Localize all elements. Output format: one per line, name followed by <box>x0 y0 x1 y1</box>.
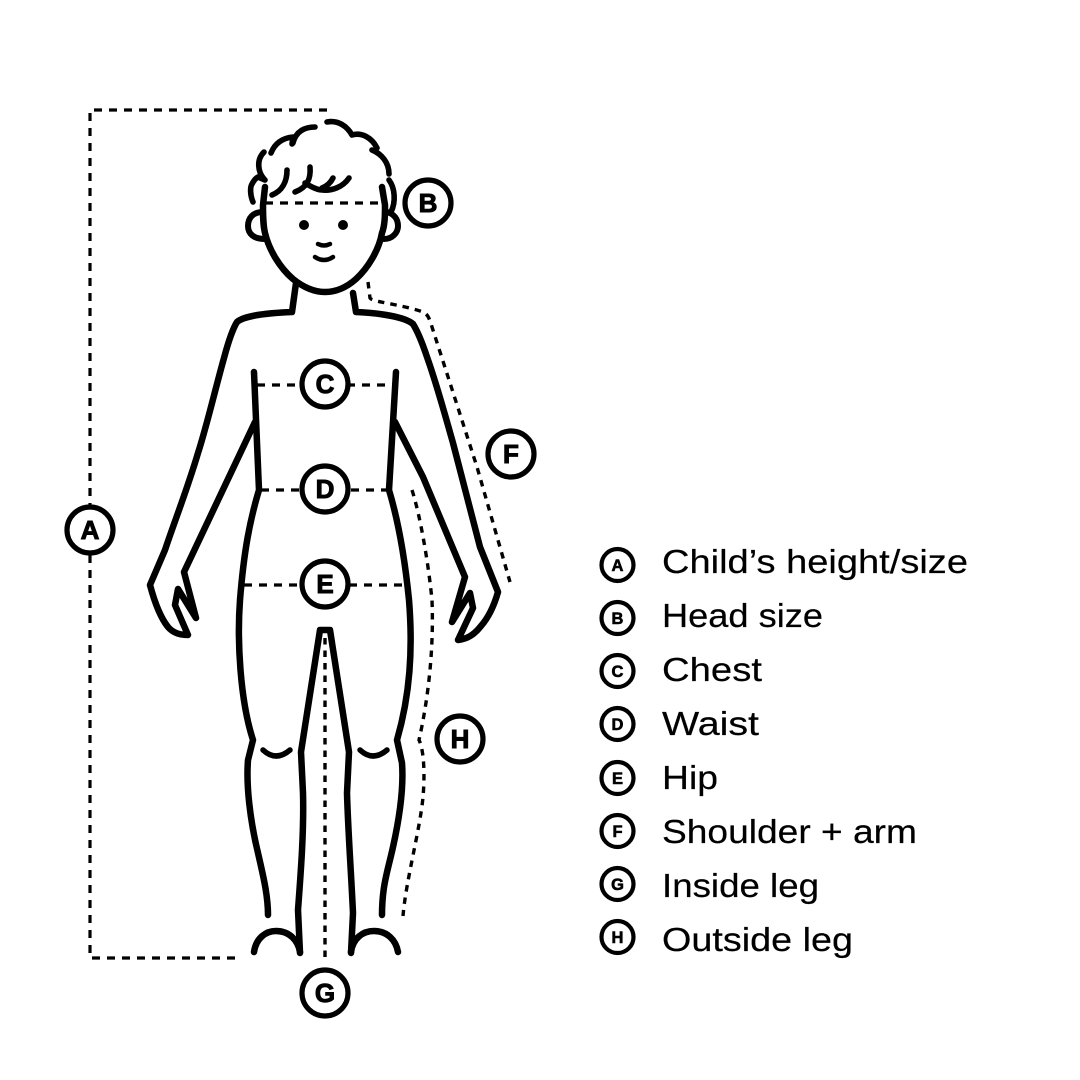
knees <box>263 750 387 756</box>
marker A: A <box>81 515 100 545</box>
marker C <box>302 361 348 407</box>
marker E: E <box>316 569 334 599</box>
hair <box>251 122 394 212</box>
marker H <box>437 716 483 762</box>
legend item F: F <box>612 823 623 841</box>
marker G <box>302 970 348 1016</box>
legend item A: A <box>612 557 624 575</box>
marker G: G <box>315 978 335 1008</box>
legend item C: Chest <box>662 652 763 689</box>
guide G inside leg <box>323 638 327 960</box>
feet <box>254 931 398 952</box>
legend item B: B <box>612 610 624 628</box>
legend item D: Waist <box>662 706 760 743</box>
guide A height <box>90 110 327 958</box>
guide B head <box>265 201 385 205</box>
ears <box>248 212 398 239</box>
eyes <box>299 220 348 230</box>
marker B <box>405 180 451 226</box>
marker D: D <box>316 474 334 504</box>
marker F <box>488 431 534 477</box>
legend item D: D <box>612 716 624 734</box>
measurement guide lines <box>90 110 510 960</box>
head and face outline <box>263 187 385 292</box>
legend item C: C <box>612 663 624 681</box>
legend item B <box>602 598 823 635</box>
nose and mouth <box>315 244 333 260</box>
marker E <box>302 561 348 607</box>
guide C chest <box>257 383 396 387</box>
child figure <box>150 122 498 953</box>
marker H: H <box>451 724 469 754</box>
marker A <box>67 507 113 553</box>
guide D waist <box>261 488 386 492</box>
legend item F: Shoulder + arm <box>662 814 917 851</box>
legend item H: Outside leg <box>662 922 853 959</box>
legend item H: H <box>612 929 623 947</box>
legend item C <box>602 652 763 689</box>
legend item H <box>602 921 853 959</box>
legend item G <box>602 868 819 905</box>
legend item E: E <box>612 770 623 788</box>
left torso and leg <box>239 372 268 915</box>
legend item E <box>602 760 718 797</box>
left side of body <box>150 283 296 635</box>
legend <box>602 544 968 959</box>
legend item G: G <box>611 876 624 894</box>
guide E hip <box>244 583 407 587</box>
marker F: F <box>503 439 519 469</box>
right side of body <box>353 293 498 640</box>
right torso and leg <box>382 372 411 915</box>
legend item B: Head size <box>662 598 823 635</box>
legend item G: Inside leg <box>662 868 819 905</box>
marker C: C <box>316 369 335 399</box>
inner legs <box>298 630 353 953</box>
marker B: B <box>419 188 437 218</box>
legend item E: Hip <box>662 760 718 797</box>
legend item A: Child’s height/size <box>662 544 968 581</box>
marker D <box>302 466 348 512</box>
legend item D <box>602 706 760 743</box>
guide H outside leg <box>403 490 432 916</box>
guide F shoulder and arm <box>368 282 510 582</box>
